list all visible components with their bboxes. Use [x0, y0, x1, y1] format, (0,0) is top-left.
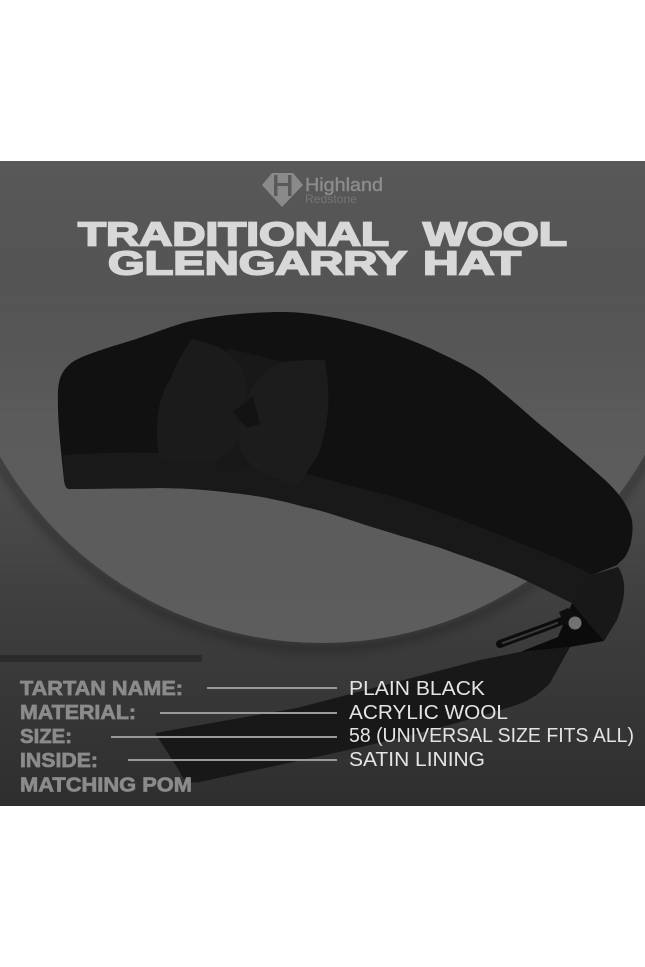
- label: inside: INSIDE:: [20, 750, 98, 772]
- title line 2: HAT: [423, 244, 521, 282]
- title line 2: [108, 244, 521, 282]
- spec labels: [20, 678, 192, 796]
- background circle: [0, 380, 645, 643]
- icon: diamond logo: [262, 173, 303, 207]
- line: size: [111, 736, 337, 738]
- connector lines: [111, 687, 337, 761]
- title: [78, 216, 567, 282]
- label: matching pom: MATCHING POM: [20, 774, 192, 796]
- label: tartan name: TARTAN NAME:: [20, 678, 183, 700]
- toggle loop: [500, 620, 564, 644]
- value: satin lining: SATIN LINING: [349, 748, 485, 771]
- line: material: [160, 712, 337, 714]
- hat band: [63, 453, 592, 603]
- line: inside: [128, 759, 337, 761]
- infographic canvas: [0, 161, 645, 806]
- toggle loop inner: [503, 623, 557, 643]
- bow centre band: [213, 348, 283, 468]
- label bar: [0, 655, 202, 662]
- background circle shadow: [0, 455, 645, 652]
- hat illustration: [58, 312, 633, 783]
- logo wordmark: Highland: [305, 175, 383, 195]
- hat body: [58, 312, 633, 603]
- title line 2: GLENGARRY: [108, 244, 407, 282]
- bow knot: [233, 396, 260, 428]
- spec values: [349, 677, 634, 771]
- bow left loop: [157, 339, 247, 463]
- title line 1: TRADITIONAL: [78, 216, 389, 252]
- logo subtitle: Redstone: [305, 192, 357, 206]
- toggle button: [559, 608, 582, 630]
- value: plain black: PLAIN BLACK: [349, 677, 485, 700]
- logo: Highland Redstone: [262, 173, 383, 207]
- label: material: MATERIAL:: [20, 702, 136, 724]
- value: acrylic wool: ACRYLIC WOOL: [349, 701, 508, 724]
- bow right loop: [238, 360, 328, 485]
- hat tail ribbon: [155, 647, 570, 783]
- title line 1: WOOL: [423, 216, 567, 252]
- dark inner fold: [520, 603, 604, 652]
- line: tartan name: [207, 687, 337, 689]
- title line 1: [78, 216, 567, 252]
- value: size: 58 (UNIVERSAL SIZE FITS ALL): [349, 724, 634, 747]
- panel: dark background: [0, 161, 645, 806]
- hat band end tab: [572, 567, 624, 641]
- label: size: SIZE:: [20, 726, 72, 748]
- toggle button face: [568, 616, 582, 630]
- bow: [157, 339, 328, 485]
